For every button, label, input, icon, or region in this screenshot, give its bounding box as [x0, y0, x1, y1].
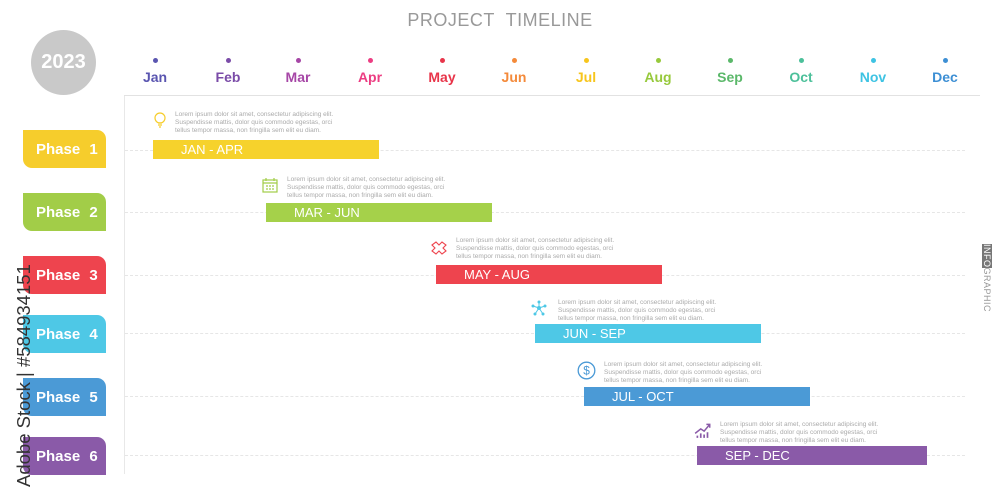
text block 5: tellus tempor massa, non fringilla sem elit eu diam. [604, 377, 750, 384]
text block 1 [175, 111, 333, 134]
month header: Dec [932, 69, 958, 85]
icon: calendar [262, 178, 278, 193]
bar: phase 1: JAN - APR [181, 142, 243, 157]
bar: phase 5: JUL - OCT [612, 389, 674, 404]
text block 1: tellus tempor massa, non fringilla sem elit eu diam. [175, 127, 321, 134]
bar: phase 4: JUN - SEP [563, 326, 626, 341]
bar: phase 2: MAR - JUN [294, 205, 360, 220]
bar: phase 3 [436, 265, 662, 284]
month header: Sep [717, 69, 743, 85]
bar: phase 6: SEP - DEC [725, 448, 790, 463]
text block 6: Suspendisse mattis, dolor quis commodo egestas, orci [720, 429, 877, 436]
month header: Nov [860, 69, 886, 85]
tab: phase 5: Phase 5 [36, 389, 98, 406]
year badge [31, 30, 96, 95]
stock id vertical text: Adobe Stock | #584934151 [13, 264, 34, 487]
bar: phase 5 [584, 387, 810, 406]
text block 6 [720, 421, 878, 444]
bar: phase 4 [535, 324, 761, 343]
icon: network [532, 300, 546, 316]
tab: phase 1 [23, 130, 106, 168]
text block 5: Suspendisse mattis, dolor quis commodo egestas, orci [604, 369, 761, 376]
month header: Mar [286, 69, 310, 85]
phase tabs [23, 130, 106, 475]
month header [143, 58, 958, 85]
icon: bulb [154, 112, 166, 128]
month header: May [428, 69, 456, 85]
year badge: 2023 [41, 51, 86, 73]
month header: Jan [143, 69, 167, 85]
text block 2: tellus tempor massa, non fringilla sem elit eu diam. [287, 192, 433, 199]
tab: phase 4 [23, 315, 106, 353]
month header: Apr [358, 69, 382, 85]
tab: phase 3: Phase 3 [36, 267, 98, 284]
text block 3 [456, 237, 614, 260]
tab: phase 6 [23, 437, 106, 475]
icon: boxes [431, 241, 447, 255]
text block 1: Lorem ipsum dolor sit amet, consectetur adipiscing elit. [175, 111, 333, 118]
icon: dollar: $ [583, 364, 590, 378]
text block 4: tellus tempor massa, non fringilla sem elit eu diam. [558, 315, 704, 322]
bar: phase 3: MAY - AUG [464, 267, 530, 282]
text block 1: Suspendisse mattis, dolor quis commodo egestas, orci [175, 119, 332, 126]
icon: growth chart [694, 424, 710, 438]
tab: phase 2: Phase 2 [36, 204, 98, 221]
month header: Jun [502, 69, 526, 85]
icon: dollar [578, 362, 596, 380]
text block 3: Suspendisse mattis, dolor quis commodo egestas, orci [456, 245, 613, 252]
month header: Oct [789, 69, 813, 85]
title: PROJECT TIMELINE [407, 10, 593, 30]
month header: Feb [216, 69, 240, 85]
text block 6: tellus tempor massa, non fringilla sem elit eu diam. [720, 437, 866, 444]
text block 5 [604, 361, 762, 384]
bar: phase 1 [153, 140, 379, 159]
text block 3: Lorem ipsum dolor sit amet, consectetur adipiscing elit. [456, 237, 614, 244]
bar: phase 6 [697, 446, 927, 465]
text block 2 [287, 176, 445, 199]
tab: phase 1: Phase 1 [36, 141, 98, 158]
tab: phase 2 [23, 193, 106, 231]
text block 6: Lorem ipsum dolor sit amet, consectetur adipiscing elit. [720, 421, 878, 428]
tab: phase 3 [23, 256, 106, 294]
text block 2: Lorem ipsum dolor sit amet, consectetur adipiscing elit. [287, 176, 445, 183]
text block 4 [558, 299, 716, 322]
tab: phase 6: Phase 6 [36, 448, 98, 465]
text block 2: Suspendisse mattis, dolor quis commodo egestas, orci [287, 184, 444, 191]
text block 3: tellus tempor massa, non fringilla sem elit eu diam. [456, 253, 602, 260]
watermark side label: INFO GRAPHIC [982, 244, 992, 312]
text block 5: Lorem ipsum dolor sit amet, consectetur adipiscing elit. [604, 361, 762, 368]
tab: phase 4: Phase 4 [36, 326, 98, 343]
bar: phase 2 [266, 203, 492, 222]
month header: Jul [576, 69, 596, 85]
month header: Aug [644, 69, 672, 85]
tab: phase 5 [23, 378, 106, 416]
text block 4: Suspendisse mattis, dolor quis commodo egestas, orci [558, 307, 715, 314]
text block 4: Lorem ipsum dolor sit amet, consectetur adipiscing elit. [558, 299, 716, 306]
